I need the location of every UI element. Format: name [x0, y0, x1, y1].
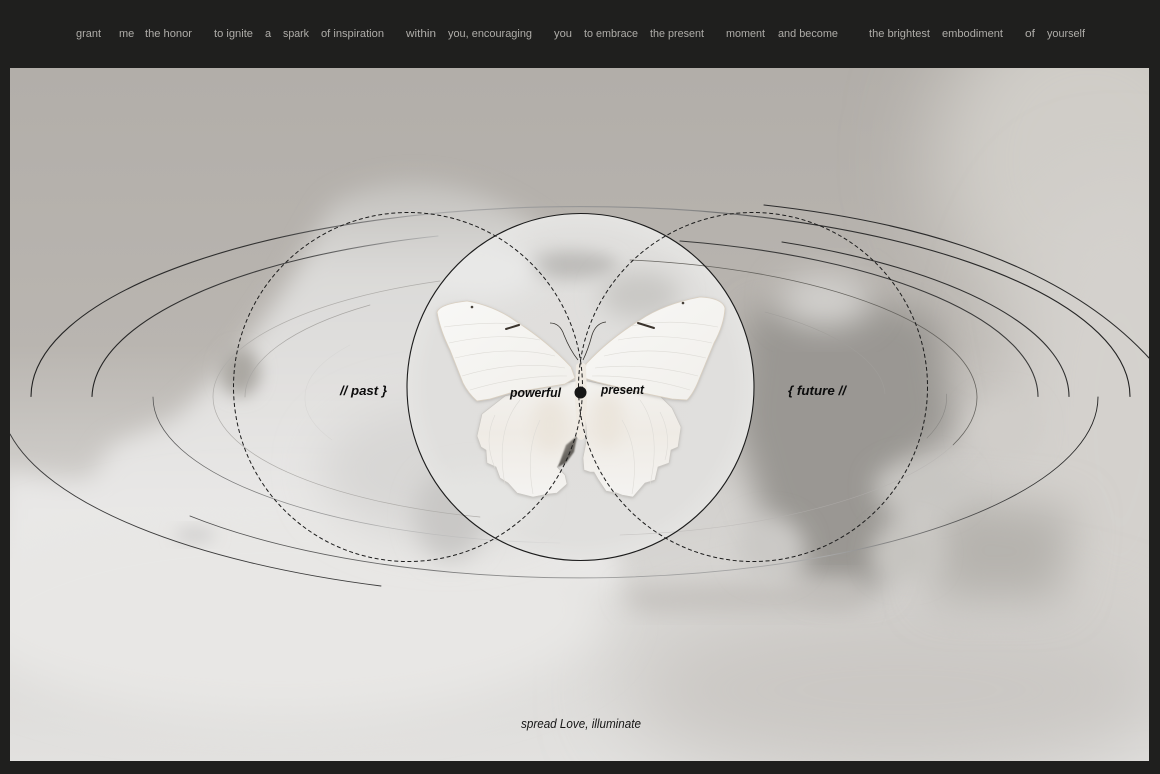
top line of text [76, 28, 1086, 40]
label: powerful: powerful [509, 385, 561, 400]
caption: spread Love, illuminate [521, 716, 641, 731]
top line of text: grant [76, 28, 101, 40]
shadow under hind wing [558, 436, 577, 467]
top line of text: you, encouraging [448, 28, 532, 40]
top line of text: the honor [145, 28, 192, 40]
top line of text: the brightest [869, 28, 930, 40]
wing veins [444, 322, 718, 494]
central circle disc fill [407, 214, 754, 560]
orbit: outer top ellipse [31, 207, 1130, 396]
right body tint [592, 392, 624, 448]
top line of text: a [265, 28, 272, 40]
label: past: // past } [339, 383, 387, 398]
orbit: lower left third arc [153, 397, 560, 543]
right forewing [584, 297, 725, 400]
orbit: lower outer arc left [10, 434, 381, 586]
body [575, 362, 587, 440]
top line of text: me [119, 28, 134, 40]
orbit lines [10, 205, 1149, 586]
top line of text: you [554, 28, 572, 40]
left hind wing [477, 380, 580, 497]
orbit: third arc right [680, 241, 1038, 396]
wing marks [471, 302, 684, 329]
orbit: fourth arc lower fade [620, 445, 953, 535]
top line of text: to ignite [214, 28, 253, 40]
orbit: lower main ellipse [190, 397, 1098, 578]
antennae [550, 322, 606, 360]
label: future: { future // [788, 383, 847, 398]
top line of text: spark [283, 28, 309, 40]
top line of text: and become [778, 28, 838, 40]
top line of text: yourself [1047, 28, 1086, 40]
top line of text: embodiment [942, 28, 1003, 40]
label: present: present [600, 382, 645, 397]
top line of text: to embrace [584, 28, 638, 40]
left body tint [532, 397, 568, 453]
dashed circle: past [234, 212, 582, 562]
orbit: fourth arc right [630, 260, 977, 445]
top line of text: within [405, 28, 436, 40]
orbit: second arc right [782, 242, 1069, 396]
top line of text: of inspiration [321, 28, 384, 40]
center dot [574, 386, 586, 398]
butterfly [437, 297, 725, 497]
orbit: left inner arc [245, 305, 370, 397]
top line of text: of [1025, 28, 1036, 40]
dashed circle: future [578, 212, 928, 562]
central solid circle [407, 214, 754, 560]
top line of text: moment [726, 28, 765, 40]
orbit: thin far right fragment [927, 394, 947, 438]
orbit: thin right arc [765, 312, 826, 334]
top line of text: the present [650, 28, 704, 40]
orbit: far right upper arc [764, 205, 1149, 358]
orbit: left mid ellipse [213, 281, 480, 517]
orbit: second arc left [92, 236, 438, 396]
orbit: left thin arc [305, 369, 328, 438]
left forewing [437, 301, 575, 401]
right hind wing [582, 380, 681, 497]
